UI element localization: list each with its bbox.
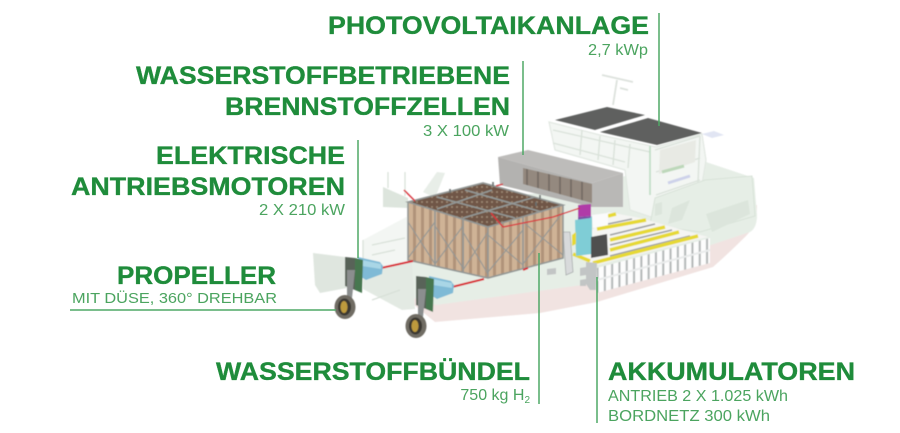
wheelhouse pale vertical post <box>649 146 651 195</box>
wheelhouse <box>549 122 706 220</box>
aft deckhouse block <box>383 187 408 208</box>
red cable to aft motor <box>381 261 413 268</box>
fuel cell container <box>498 150 623 207</box>
aft window sail <box>423 172 445 198</box>
red cable to starboard motor <box>452 279 484 287</box>
label: electric motors <box>71 142 346 219</box>
label: electric motors: 2 X 210 kW <box>259 202 346 219</box>
ship illustration <box>313 75 757 338</box>
bundle right face <box>488 205 563 278</box>
label: electric motors: ELEKTRISCHE <box>156 142 345 170</box>
battery modules <box>597 238 710 293</box>
wheelhouse window frames <box>553 130 700 195</box>
dark transformer cabinet <box>591 234 608 258</box>
aft deck, ghost block <box>363 262 415 310</box>
label: propeller <box>72 262 277 307</box>
label: fuel cells: BRENNSTOFFZELLEN <box>225 93 510 121</box>
bundle top deck <box>408 183 563 227</box>
forward deck house <box>650 176 755 232</box>
leader line: hydrogen bundle <box>538 253 540 404</box>
cyan inverter cabinet <box>575 216 592 256</box>
grey fittings <box>547 262 597 290</box>
label: hydrogen bundle <box>216 357 530 406</box>
label: batteries <box>608 358 855 425</box>
leader line: batteries <box>596 277 598 423</box>
thruster one <box>334 257 383 319</box>
label: hydrogen bundle: 750 kg H <box>460 387 524 404</box>
aft ghost details <box>363 172 405 300</box>
battery deck grey bands <box>608 219 690 256</box>
leader line: propeller <box>70 309 336 311</box>
label: fuel cells <box>136 62 510 140</box>
purple converter base <box>578 216 591 222</box>
label: electric motors: ANTRIEBSMOTOREN <box>71 173 345 201</box>
red cable network <box>404 184 580 227</box>
bundle left face <box>408 202 488 278</box>
radar dish <box>702 131 724 138</box>
label: propeller: MIT DÜSE, 360° DREHBAR <box>72 289 277 307</box>
stern block <box>313 253 347 293</box>
label: photovoltaics <box>328 12 649 59</box>
red cable right stub <box>523 268 528 270</box>
hull, lower pink section <box>408 205 757 322</box>
leader line: electric motors <box>357 140 359 258</box>
solar panel left <box>555 107 645 130</box>
label: photovoltaics: 2,7 kWp <box>588 42 648 59</box>
battery deck <box>575 212 708 266</box>
forward deck house panels <box>655 200 750 232</box>
battery module rail <box>597 250 710 280</box>
solar panel right <box>600 118 702 145</box>
grey piping column <box>563 232 573 275</box>
aft deck, very pale <box>363 215 412 277</box>
label: fuel cells: WASSERSTOFFBETRIEBENE <box>136 62 510 90</box>
label: batteries: AKKUMULATOREN <box>608 358 855 386</box>
bundle frames <box>408 182 563 278</box>
label: hydrogen bundle: WASSERSTOFFBÜNDEL <box>216 357 530 386</box>
label: batteries: ANTRIEB 2 X 1.025 kWh <box>608 388 788 405</box>
wheelhouse interior, tinted window <box>659 140 696 174</box>
label: photovoltaics: PHOTOVOLTAIKANLAGE <box>328 12 649 40</box>
label: propeller: PROPELLER <box>117 262 276 290</box>
leader line: fuel cells <box>522 61 524 155</box>
thruster two <box>406 276 454 338</box>
mast radar <box>602 75 633 105</box>
magenta converter <box>578 204 591 217</box>
ship lettering decoration <box>662 166 690 183</box>
yellow deck edge <box>572 232 576 246</box>
label: fuel cells: 3 X 100 kW <box>423 123 510 140</box>
hydrogen bundle <box>408 182 563 278</box>
hull, pale green upper section <box>408 160 757 305</box>
leader line: photovoltaics <box>658 13 660 126</box>
label: hydrogen bundle: 2 <box>524 395 530 406</box>
battery deck yellow stripes <box>573 214 698 263</box>
label: batteries: BORDNETZ 300 kWh <box>608 408 770 425</box>
white switchgear <box>592 213 608 228</box>
